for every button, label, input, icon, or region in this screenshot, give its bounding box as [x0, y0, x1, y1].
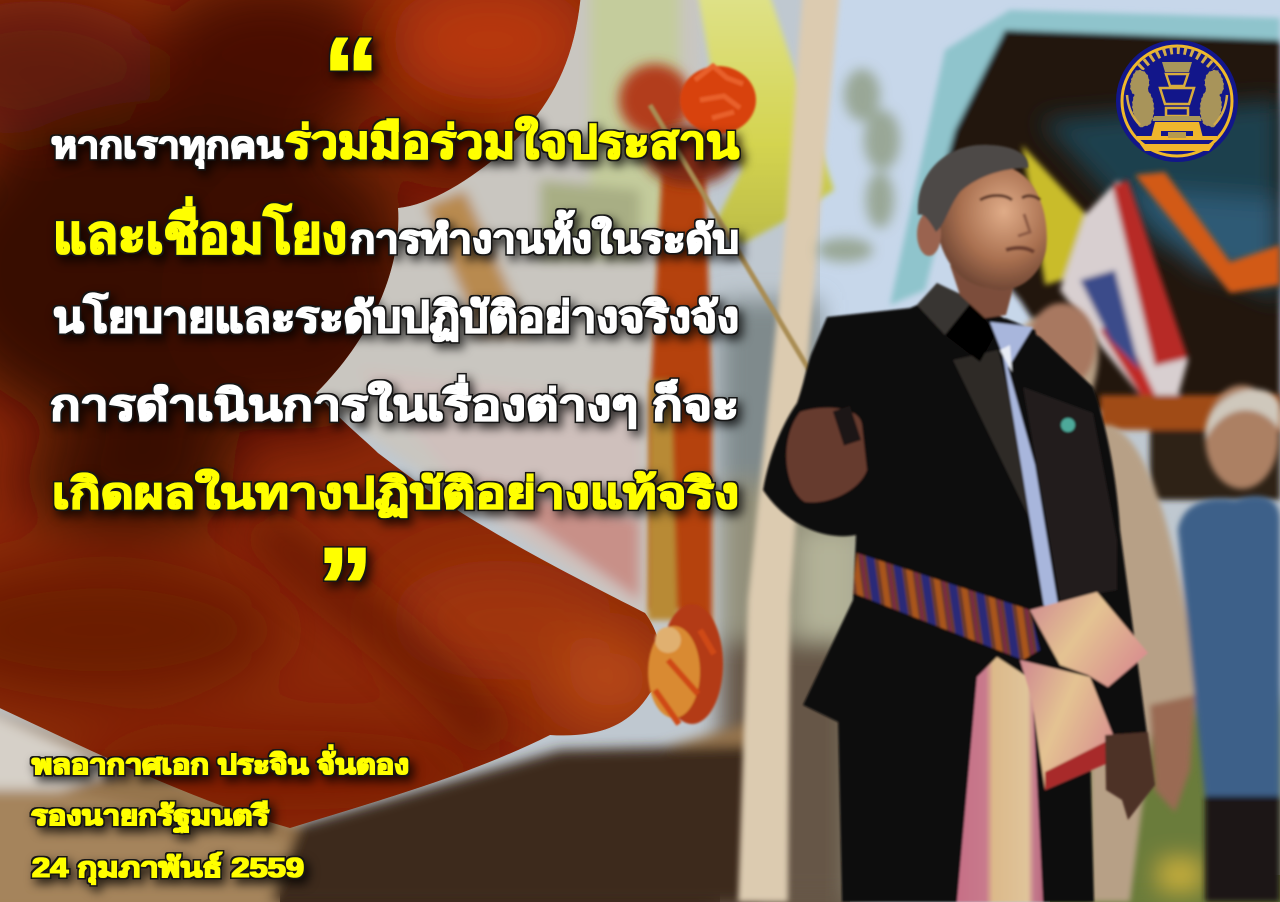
pin badge: [1061, 418, 1075, 432]
central urn: [1162, 62, 1192, 72]
white thread fabric: [300, 0, 712, 640]
line 1: หากเราทุกคน: [51, 125, 283, 169]
head: [934, 163, 1047, 290]
line 5: เกิดผลในทางปฏิบัติอย่างแท้จริง: [52, 468, 739, 518]
opening quotation mark: “: [323, 14, 379, 140]
sash knot: [1030, 592, 1148, 687]
government seal logo: [1116, 40, 1238, 162]
pedestal: [1137, 122, 1217, 151]
sky: [820, 0, 1280, 340]
right hand: [1105, 732, 1155, 820]
line 3: นโยบายและระดับปฏิบัติอย่างจริงจัง: [53, 291, 739, 342]
bunting flags: [1022, 145, 1280, 500]
eye, nose and mouth shadows: [980, 196, 1040, 200]
date: 24 กุมภาพันธ์ 2559: [32, 852, 304, 885]
orange red monk cloth: [0, 0, 657, 828]
ear: [917, 212, 941, 256]
yellow flag: [697, 0, 834, 244]
line 1: ร่วมมือร่วมใจประสาน: [285, 115, 740, 168]
sash tail long: [957, 657, 1043, 902]
collar: [917, 283, 973, 335]
line 2: การทำงานทั้งในระดับ: [350, 210, 739, 262]
attribution: name, position, date: [31, 744, 409, 885]
line 4: การดำเนินการในเรื่องต่างๆ ก็จะ: [50, 375, 739, 430]
hair: [918, 145, 1028, 232]
tree foliage: [817, 69, 900, 262]
vest and lapel: [953, 350, 1040, 540]
quote text: [50, 115, 740, 518]
striped sash: [853, 553, 1040, 660]
ground underlay strips: [0, 875, 1280, 902]
wooden pole: [738, 0, 840, 902]
sash tail short: [1020, 660, 1115, 790]
line 2: และเชื่อมโยง: [53, 196, 347, 265]
straw ground bottom left: [0, 690, 760, 902]
position: รองนายกรัฐมนตรี: [31, 800, 269, 834]
shirt: [990, 322, 1058, 606]
closing quotation mark: ”: [317, 524, 373, 650]
lion guardians: [1130, 70, 1154, 128]
name: พลอากาศเอก ประจิน จั่นตอง: [32, 744, 409, 780]
background people: [1020, 303, 1280, 902]
incense stick: [650, 105, 832, 408]
trousers: [838, 715, 1094, 902]
flame arc: [1140, 50, 1214, 68]
main figure: man in black suit: [763, 145, 1155, 902]
neck: [950, 265, 1018, 318]
marigold garlands: [619, 64, 756, 724]
building roof: [890, 10, 1280, 410]
blurred ground and trees: [720, 300, 1280, 902]
hand holding incense: [786, 408, 867, 502]
jacket: [763, 283, 1147, 790]
orange vertical garland cord: [650, 170, 712, 640]
